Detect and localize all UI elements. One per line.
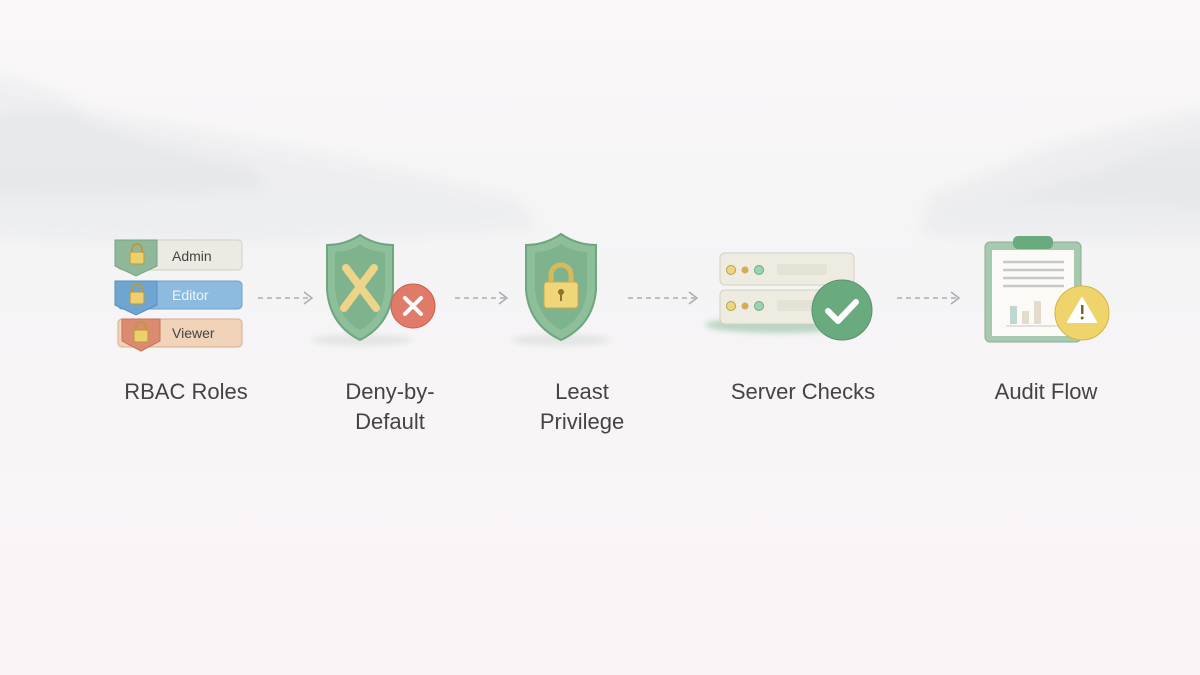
icon: least privilege shield [511,234,611,346]
icon: server with check [705,253,872,340]
label: Least Privilege: Least [555,379,609,404]
label: RBAC Roles: RBAC Roles [124,379,248,404]
badge: Admin: Admin [172,248,212,264]
arrow 1 [258,292,312,304]
badge: Viewer: Viewer [172,325,215,341]
label: Audit Flow: Audit Flow [995,379,1097,404]
label: Deny-by-Default: Default [355,409,425,434]
arrow 4 [897,292,959,304]
icon: audit clipboard [985,236,1109,342]
label: Least Privilege: Privilege [540,409,624,434]
panel: RBAC roles [115,240,242,351]
arrow 3 [628,292,697,304]
icon: deny shield [312,235,435,346]
label: Server Checks: Server Checks [731,379,875,404]
arrow 2 [455,292,507,304]
label: Deny-by-Default: Deny-by- [345,379,435,404]
badge: Editor: Editor [172,287,209,303]
labels [124,379,1097,434]
